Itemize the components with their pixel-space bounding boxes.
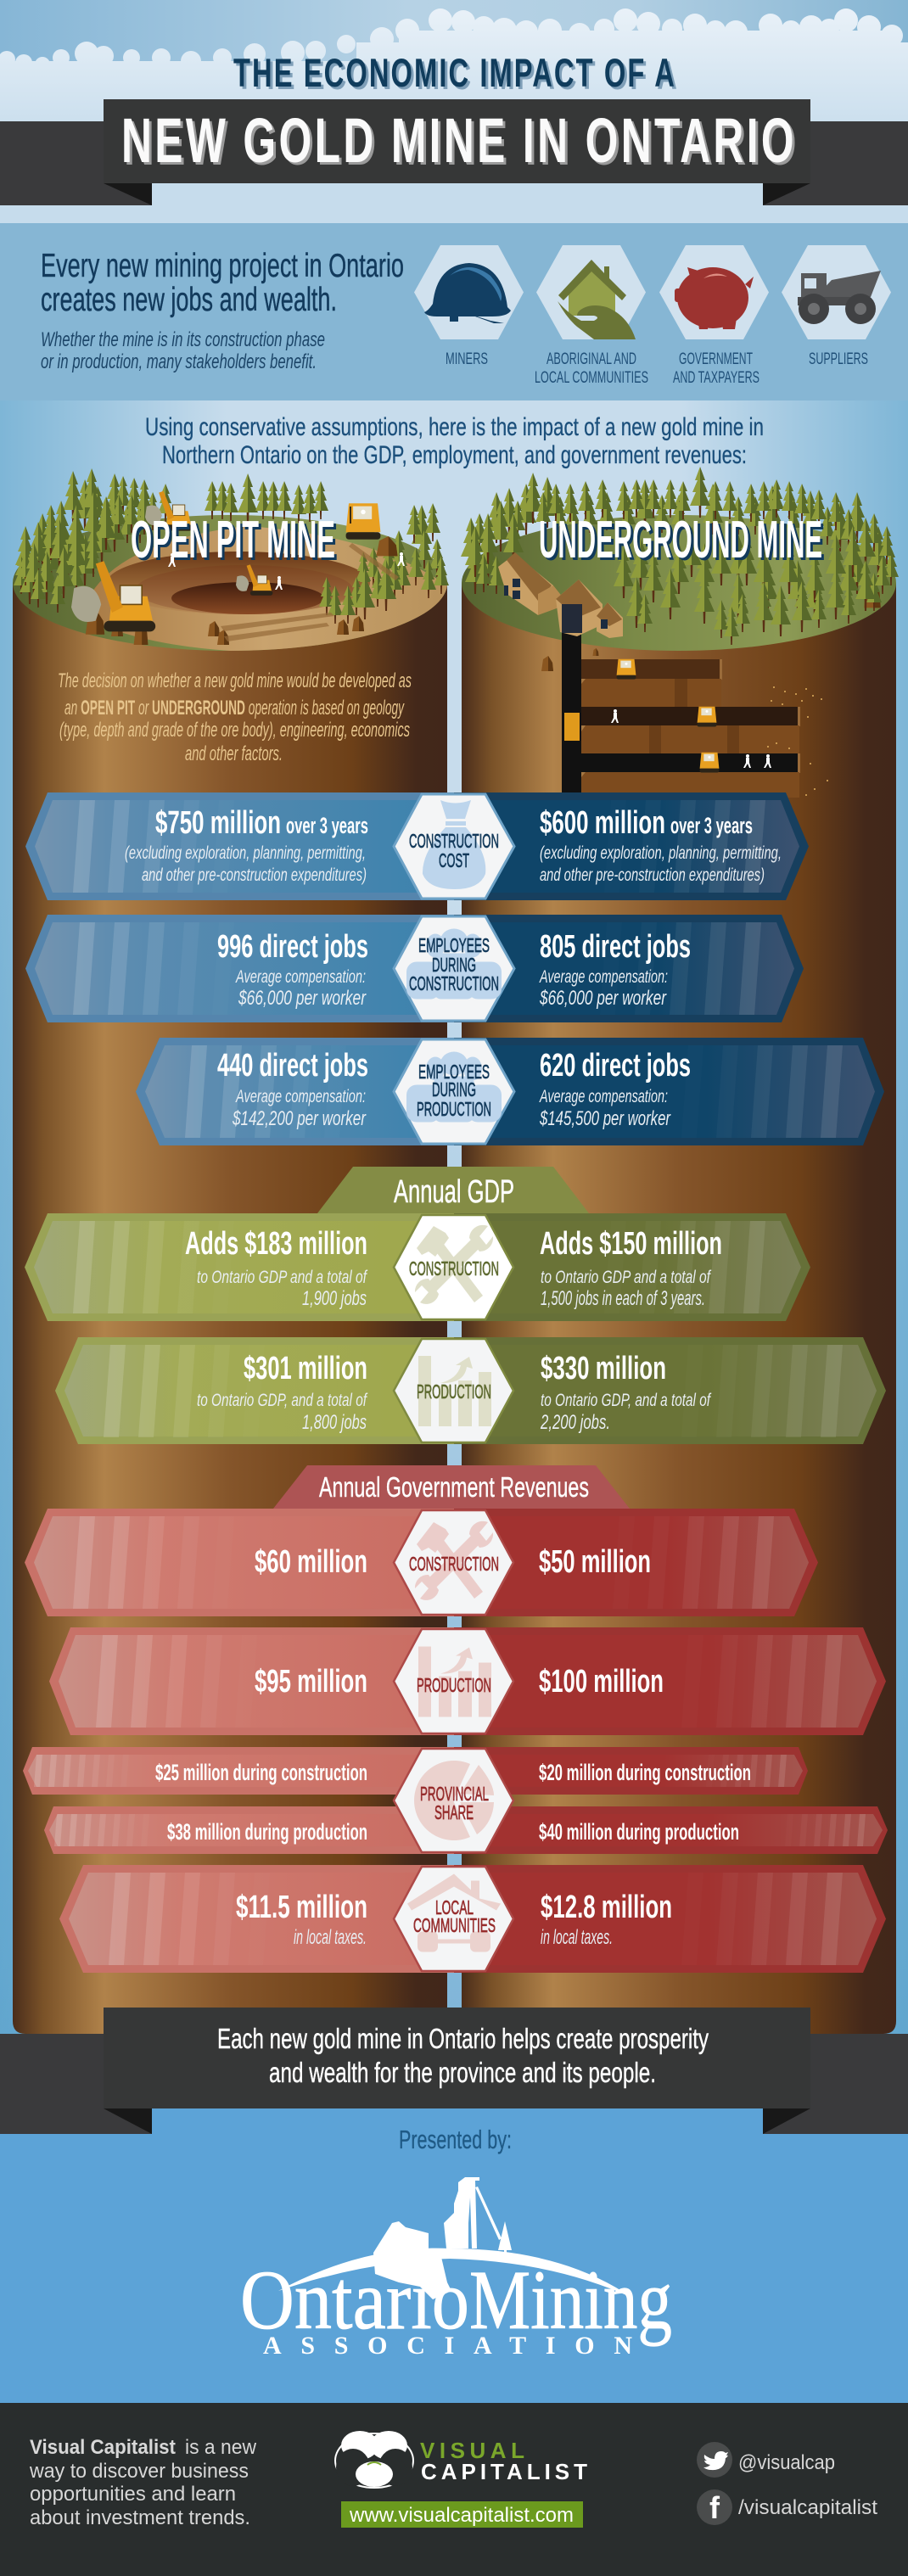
- row: construction cost: [25, 792, 809, 900]
- Visual Capitalist wordmark: VISUAL: [420, 2438, 524, 2463]
- upper left bar: [23, 1747, 454, 1795]
- presented by label: Presented by:: [399, 2125, 512, 2154]
- logo association line: ASSOCIATION: [263, 2332, 632, 2360]
- text: decision paragraph: (type, depth and grade of the ore body), engineering, economics: [59, 719, 410, 742]
- left figures: over 3 years: [286, 813, 368, 838]
- right figures: to Ontario GDP, and a total of: [541, 1391, 712, 1410]
- left bar: [49, 1627, 454, 1735]
- hexagon with people: EMPLOYEES: [418, 1061, 490, 1083]
- right figures: [539, 929, 691, 1010]
- hexagon with tools: CONSTRUCTION: [409, 1553, 499, 1575]
- right bar: [454, 1213, 810, 1321]
- facebook handle: /visualcapitalist: [738, 2496, 877, 2519]
- footer description: about investment trends.: [30, 2506, 250, 2529]
- hexagon with pie chart: [394, 1749, 513, 1852]
- cylinder: underground mine: [461, 467, 899, 2034]
- footer description: way to discover business: [29, 2460, 249, 2483]
- underground machines and miners: [611, 659, 771, 772]
- intro sentence: [145, 413, 764, 469]
- heading: annual government revenues: [273, 1465, 630, 1509]
- closing statement: and wealth for the province and its people.: [269, 2057, 656, 2088]
- left figures: to Ontario GDP, and a total of: [197, 1391, 368, 1410]
- stakeholder labels: MINERS: [446, 350, 488, 368]
- text: decision paragraph: [58, 669, 412, 765]
- icon: suppliers truck hexagon: [782, 245, 891, 339]
- right figure: $100 million: [539, 1664, 664, 1700]
- right figures: Average compensation:: [539, 967, 668, 987]
- icon: miners hexagon: [414, 245, 524, 339]
- rocks: [86, 536, 398, 645]
- hexagon with people: [394, 916, 514, 1021]
- icon: twitter: [697, 2442, 732, 2478]
- stakeholder labels: ABORIGINAL AND: [546, 350, 636, 368]
- elevator cage: [564, 713, 580, 741]
- terrace lines: [221, 543, 399, 641]
- hexagon with people: DURING: [432, 954, 476, 976]
- left figures: 440 direct jobs: [217, 1048, 368, 1084]
- right figures: 805 direct jobs: [540, 929, 691, 965]
- left figures: Average compensation:: [235, 967, 366, 987]
- closing statement: Each new gold mine in Ontario helps create prosperity: [217, 2023, 709, 2054]
- right bar: [454, 1337, 886, 1444]
- hexagon with people: EMPLOYEES: [418, 934, 490, 956]
- heading: annual government revenues: Annual Government Revenues: [319, 1471, 589, 1503]
- left bar: [25, 1213, 454, 1321]
- left bar: [25, 1509, 454, 1616]
- heading: open pit mine: OPEN PIT MINE: [133, 513, 338, 572]
- left bar: [25, 915, 454, 1022]
- heading: annual GDP: Annual GDP: [394, 1174, 514, 1210]
- right figures: [541, 1890, 672, 1949]
- stakeholder labels: GOVERNMENT: [679, 350, 753, 368]
- ground surface: [462, 515, 896, 651]
- right bar: [454, 1627, 886, 1735]
- Visual Capitalist wordmark: [420, 2438, 587, 2484]
- left figures: in local taxes.: [294, 1926, 367, 1949]
- hexagon with house: LOCAL: [435, 1896, 474, 1918]
- hexagon with money bag: [394, 794, 514, 899]
- left figures: 1,900 jobs: [302, 1287, 367, 1310]
- hexagon with bar chart icon: PRODUCTION: [417, 1380, 491, 1403]
- right figures: $12.8 million: [541, 1890, 672, 1925]
- right figures: 2,200 jobs.: [540, 1411, 610, 1434]
- right figures: [539, 1760, 751, 1845]
- hexagon with bar chart icon: [394, 1339, 513, 1442]
- right figure: $50 million: [539, 1544, 651, 1580]
- lower right bar: [454, 1806, 888, 1854]
- text: decision paragraph: The decision on whether a new gold mine would be developed as: [58, 669, 412, 692]
- footer description: [29, 2436, 257, 2529]
- hexagon with tools: [394, 1510, 513, 1615]
- presented-by background: [0, 2034, 908, 2403]
- left figures: Adds $183 million: [185, 1226, 367, 1262]
- top ribbon: [0, 99, 908, 205]
- row: employees during production: [136, 1038, 884, 1145]
- hexagon with people: PRODUCTION: [417, 1098, 491, 1120]
- right bar: [454, 915, 804, 1022]
- right figures: $600 million: [540, 805, 665, 841]
- panel: stakeholders band: [0, 223, 908, 400]
- bottom ribbon: [0, 2008, 908, 2134]
- Visual Capitalist wordmark: CAPITALIST: [421, 2459, 587, 2484]
- left bar: [55, 1337, 454, 1444]
- closing statement: [217, 2023, 709, 2088]
- clouds: [0, 8, 908, 223]
- logo wordmark second part: Mining: [469, 2253, 672, 2347]
- text: decision paragraph: and other factors.: [185, 742, 283, 765]
- left bar: [59, 1865, 454, 1973]
- row: GDP production: [55, 1337, 886, 1444]
- hexagon with pie chart: PROVINCIAL: [420, 1783, 489, 1805]
- left figures: [236, 1890, 367, 1949]
- Visual Capitalist logo icon: [335, 2431, 413, 2488]
- trees: underground: [461, 467, 899, 645]
- text: decision paragraph: an OPEN PIT or UNDERGROUND operation is based on geology: [64, 697, 405, 720]
- hexagon with money bag: CONSTRUCTION: [409, 830, 499, 852]
- rocks: [541, 580, 881, 671]
- ground surface: [13, 515, 447, 651]
- right figures: to Ontario GDP and a total of: [541, 1268, 712, 1287]
- right bar: [454, 1038, 884, 1145]
- left figures: (excluding exploration, planning, permitting,: [125, 843, 366, 863]
- shaft and tunnels: [562, 632, 800, 802]
- hexagon with house: COMMUNITIES: [413, 1914, 496, 1936]
- hexagon with bar chart icon: PRODUCTION: [417, 1674, 491, 1696]
- title line one: [233, 50, 679, 98]
- heading: annual GDP: [317, 1167, 589, 1213]
- left figure: $95 million: [255, 1664, 367, 1700]
- right figures: (excluding exploration, planning, permitting,: [540, 843, 782, 863]
- row: revenues construction: [25, 1509, 818, 1616]
- hexagon with people: CONSTRUCTION: [409, 972, 499, 994]
- footer description: Visual Capitalist: [30, 2436, 176, 2459]
- mine buildings: [498, 552, 623, 638]
- hexagon with people: [394, 1039, 514, 1144]
- right figures: Average compensation:: [539, 1087, 668, 1106]
- logo: Ontario Mining Association: [240, 2177, 672, 2360]
- left figures: $750 million: [155, 805, 281, 841]
- intro note: [41, 328, 325, 373]
- left figures: $66,000 per worker: [238, 987, 367, 1010]
- right figures: [540, 805, 782, 885]
- intro heading: creates new jobs and wealth.: [41, 282, 337, 318]
- right bar: [454, 792, 809, 900]
- lower background: [0, 400, 908, 2038]
- hexagon with tools: [394, 1215, 513, 1319]
- right figures: and other pre-construction expenditures): [540, 865, 765, 885]
- right figures: [539, 1048, 691, 1130]
- left figures: 1,800 jobs: [302, 1411, 367, 1434]
- icon: government piggy bank hexagon: [659, 245, 769, 339]
- intro note: or in production, many stakeholders benefit.: [41, 350, 317, 373]
- intro note: Whether the mine is in its construction phase: [41, 328, 325, 351]
- right bar: [454, 1865, 886, 1973]
- icon: facebook: f: [709, 2490, 720, 2525]
- pit terraces: [81, 526, 447, 651]
- logo wordmark: Ontario: [240, 2253, 469, 2347]
- hexagon with bar chart icon: [394, 1629, 513, 1733]
- sky background: [0, 0, 908, 400]
- row: revenues production: [49, 1627, 886, 1735]
- left bar: [25, 792, 454, 900]
- row: provincial share: [23, 1747, 888, 1854]
- right figures: 1,500 jobs in each of 3 years.: [541, 1287, 705, 1310]
- logo art: headframe, province and arc: [278, 2177, 632, 2299]
- left figures: [125, 805, 368, 885]
- left figures: [155, 1760, 367, 1845]
- title line one: THE ECONOMIC IMPACT OF A: [236, 53, 679, 98]
- heading: open pit mine: [131, 511, 338, 572]
- hexagon with house: [394, 1867, 513, 1971]
- icon: facebook: [697, 2489, 732, 2525]
- icon: communities hexagon: [536, 245, 646, 339]
- machines: excavators and dozers: [71, 491, 405, 631]
- website box: www.visualcapitalist.com: [349, 2504, 574, 2527]
- left figures: $301 million: [244, 1351, 367, 1386]
- stakeholder labels: LOCAL COMMUNITIES: [535, 369, 648, 387]
- right figures: $40 million during production: [539, 1819, 739, 1845]
- right figures: in local taxes.: [541, 1926, 613, 1949]
- ore specks: [767, 686, 828, 796]
- left figures: [185, 1226, 368, 1310]
- upper right bar: [454, 1747, 808, 1795]
- left figures: [197, 1351, 368, 1434]
- left figures: [217, 1048, 368, 1130]
- intro heading: [41, 248, 404, 318]
- right figures: $330 million: [541, 1351, 666, 1386]
- left figures: $142,200 per worker: [232, 1107, 367, 1130]
- stakeholder labels: AND TAXPAYERS: [673, 369, 759, 387]
- right figures: [540, 1351, 712, 1434]
- footer description: opportunities and learn: [30, 2483, 236, 2506]
- right figures: $20 million during construction: [539, 1760, 751, 1785]
- stakeholder labels: [446, 350, 868, 387]
- left figures: and other pre-construction expenditures): [142, 865, 367, 885]
- row: GDP construction: [25, 1213, 810, 1321]
- twitter handle: @visualcap: [738, 2451, 835, 2474]
- stakeholder labels: SUPPLIERS: [809, 350, 868, 368]
- heading: open pit mine: OPEN PIT MINE: [131, 511, 335, 569]
- left figure: $60 million: [255, 1544, 367, 1580]
- footer: [0, 2403, 908, 2576]
- hexagon with tools: CONSTRUCTION: [409, 1257, 499, 1280]
- cylinder: open pit mine: [13, 468, 449, 2034]
- left figures: $11.5 million: [236, 1890, 367, 1925]
- right figures: over 3 years: [670, 813, 753, 838]
- right figures: $66,000 per worker: [539, 987, 667, 1010]
- left figures: $25 million during construction: [155, 1760, 367, 1785]
- footer description: is a new: [185, 2436, 257, 2459]
- left figures: 996 direct jobs: [217, 929, 368, 965]
- lower left bar: [44, 1806, 454, 1854]
- left figures: $38 million during production: [167, 1819, 367, 1845]
- intro heading: Every new mining project in Ontario: [41, 248, 404, 284]
- row: local communities: [59, 1865, 886, 1973]
- left figures: Average compensation:: [235, 1087, 366, 1106]
- right bar: [454, 1509, 818, 1616]
- trees: open pit: [14, 468, 449, 624]
- right figures: 620 direct jobs: [540, 1048, 691, 1084]
- hexagon with pie chart: SHARE: [434, 1801, 474, 1823]
- hexagon with people: DURING: [432, 1078, 476, 1100]
- left figures: to Ontario GDP and a total of: [197, 1268, 368, 1287]
- title line one: THE ECONOMIC IMPACT OF A: [233, 50, 676, 95]
- row: employees during construction: [25, 915, 804, 1022]
- right figures: [540, 1226, 722, 1310]
- right figures: Adds $150 million: [540, 1226, 722, 1262]
- hexagon with money bag: COST: [439, 849, 469, 871]
- left figures: [217, 929, 368, 1010]
- left bar: [136, 1038, 454, 1145]
- right figures: $145,500 per worker: [539, 1107, 671, 1130]
